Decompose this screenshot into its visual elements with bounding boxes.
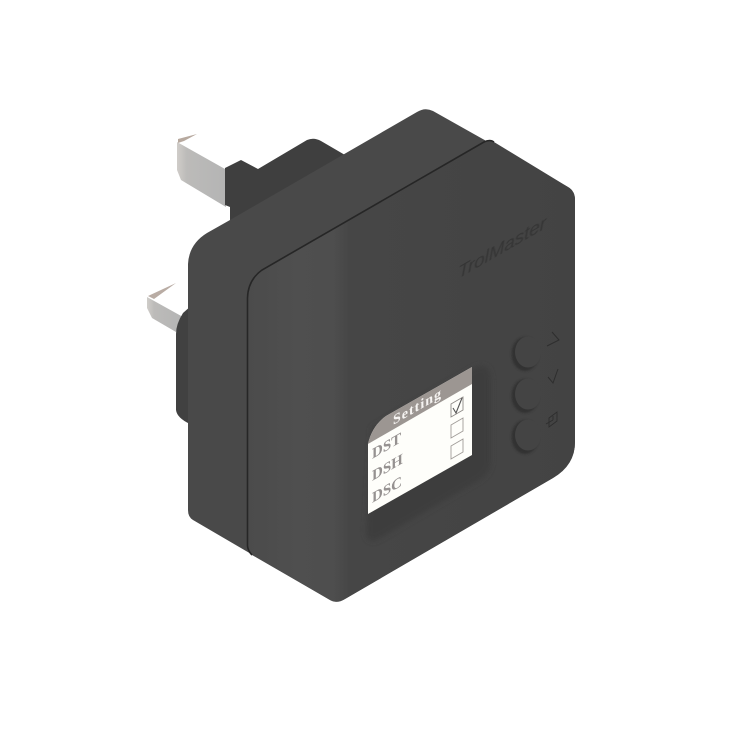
button: confirm [512,378,541,413]
button: next [512,336,541,371]
display panel [368,367,472,514]
row label DSC: DSC [372,473,402,507]
display [368,367,472,514]
screen recess [366,366,491,541]
icon: check [548,369,558,383]
header text: Setting [393,385,442,429]
icon: arrow next [547,332,559,346]
button: enter [512,420,541,454]
checkbox empty DSC [451,439,463,459]
plug pin: top blade [177,134,226,207]
display header band [368,367,472,444]
row label DST: DST [372,429,401,463]
seam line [248,140,494,555]
checkbox checked [451,397,463,417]
checkbox empty DSH [451,418,463,438]
rear bulge behind lower pin [176,305,200,424]
icon: enter box [546,412,557,427]
embossed logo: TrolMaster [458,211,547,284]
housing front shell [248,140,575,602]
plug pin: lower blade [147,283,183,332]
plug base behind body [225,139,345,250]
row label DSH: DSH [372,450,403,485]
housing rear shell [188,109,575,602]
